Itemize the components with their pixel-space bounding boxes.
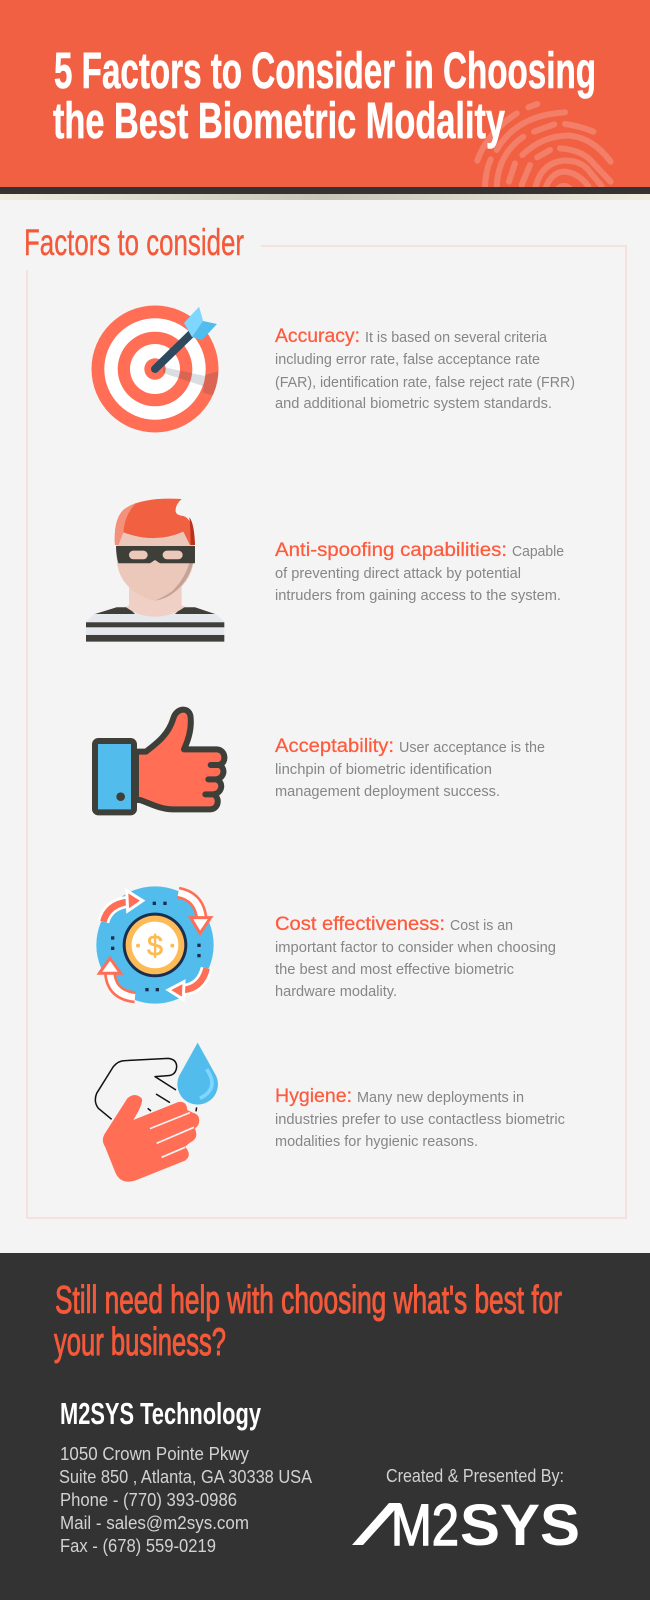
item text: acceptability: linchpin of biometric identification bbox=[275, 762, 492, 778]
item text: accuracy: including error rate, false acceptance rate bbox=[275, 352, 540, 368]
icon: coin with cycle arrows: $ bbox=[147, 931, 163, 963]
item text: anti-spoofing bbox=[275, 540, 564, 604]
item text: cost effectiveness: hardware modality. bbox=[275, 984, 397, 1000]
created by label: Created & Presented By: bbox=[386, 1466, 564, 1486]
icon: target with arrow bbox=[92, 306, 219, 432]
item text: accuracy: It is based on several criteria bbox=[365, 330, 548, 346]
logo: M2SYS bbox=[352, 1493, 580, 1558]
item text: anti-spoofing: of preventing direct attack by potential bbox=[275, 566, 521, 582]
item text: hygiene: Many new deployments in bbox=[357, 1090, 524, 1106]
item text: accuracy bbox=[275, 326, 575, 412]
item text: anti-spoofing: Anti-spoofing capabilities: bbox=[275, 540, 507, 561]
address block: Fax - (678) 559-0219 bbox=[60, 1536, 216, 1556]
item text: acceptability: Acceptability: bbox=[275, 736, 394, 757]
item text: cost effectiveness: Cost is an bbox=[450, 918, 513, 934]
panel border bbox=[27, 246, 626, 1218]
item text: anti-spoofing: Capable bbox=[512, 544, 564, 560]
icon: hands and water drop bbox=[95, 1043, 218, 1182]
heading: factors to consider: Factors to consider bbox=[24, 222, 244, 263]
item text: cost effectiveness bbox=[275, 914, 556, 1000]
item text: acceptability: User acceptance is the bbox=[399, 740, 545, 756]
icon: fingerprint bbox=[477, 104, 611, 190]
footer panel bbox=[0, 1253, 650, 1600]
item text: acceptability bbox=[275, 736, 545, 800]
icon: coin with cycle arrows bbox=[96, 886, 214, 1004]
item text: cost effectiveness: Cost effectiveness: bbox=[275, 914, 445, 935]
item text: hygiene: industries prefer to use contactless biometric bbox=[275, 1112, 565, 1128]
icon: thumbs up bbox=[95, 710, 224, 812]
address block: Mail - sales@m2sys.com bbox=[60, 1513, 249, 1533]
item text: accuracy: Accuracy: bbox=[275, 326, 360, 347]
logo: M2SYS: M2 bbox=[391, 1493, 459, 1558]
title bbox=[53, 42, 596, 149]
item text: acceptability: management deployment success. bbox=[275, 784, 500, 800]
item text: hygiene bbox=[275, 1086, 565, 1150]
logo: M2SYS: SYS bbox=[460, 1493, 580, 1558]
address block: Phone - (770) 393-0986 bbox=[60, 1490, 237, 1510]
item text: hygiene: Hygiene: bbox=[275, 1086, 352, 1107]
address block: Suite 850 , Atlanta, GA 30338 USA bbox=[59, 1467, 312, 1487]
item text: anti-spoofing: intruders from gaining access to the system. bbox=[275, 588, 561, 604]
item text: accuracy: (FAR), identification rate, false reject rate (FRR) bbox=[275, 375, 575, 391]
footer call to action bbox=[54, 1279, 562, 1364]
item text: accuracy: and additional biometric system standards. bbox=[275, 396, 552, 412]
item text: cost effectiveness: the best and most effective biometric bbox=[275, 962, 514, 978]
header banner bbox=[0, 0, 650, 200]
address block: 1050 Crown Pointe Pkwy bbox=[60, 1444, 249, 1464]
address block bbox=[59, 1444, 312, 1556]
footer call to action: your business? bbox=[54, 1321, 226, 1364]
item text: hygiene: modalities for hygienic reasons. bbox=[275, 1134, 478, 1150]
item text: cost effectiveness: important factor to consider when choosing bbox=[275, 940, 556, 956]
icon: masked thief bbox=[86, 499, 224, 642]
company name: M2SYS Technology bbox=[60, 1396, 262, 1431]
